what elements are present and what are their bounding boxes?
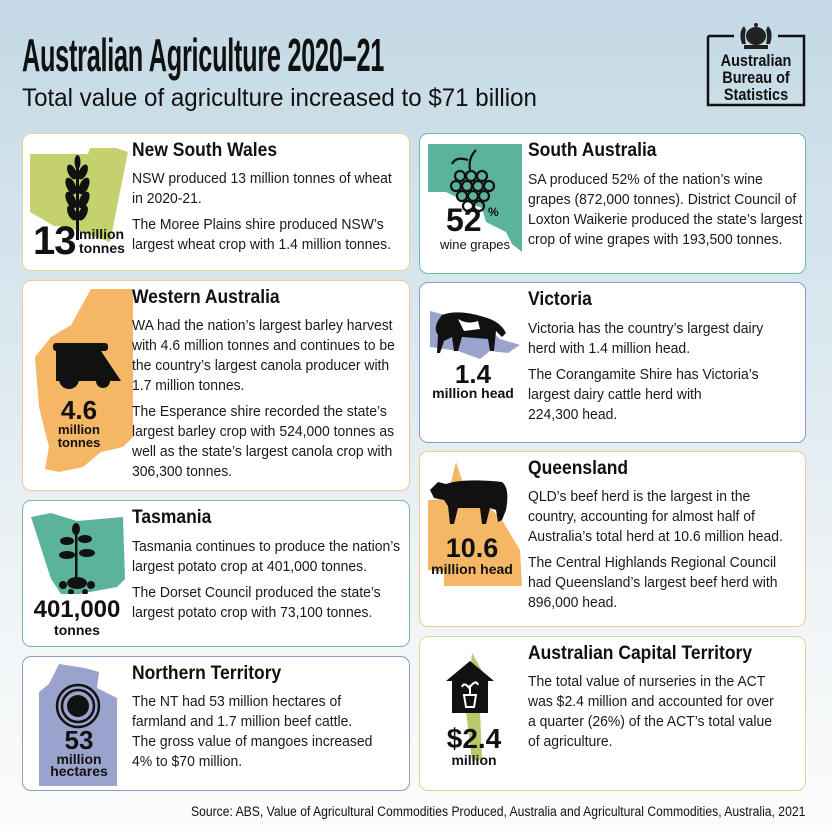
panel: Australian Capital Territory: a quarter (26%) of the ACT’s total value	[528, 713, 772, 730]
stat: 53 million hectares: 53	[65, 725, 93, 755]
panel: Tasmania: The Dorset Council produced the state’s	[132, 584, 381, 601]
logo: ABS: Australian	[721, 51, 791, 70]
stat: 13 million tonnes	[33, 219, 125, 263]
logo: ABS: Statistics	[724, 85, 788, 104]
stat: 4.6 million tonnes: tonnes	[58, 435, 100, 450]
map: SA with grapes icon	[428, 144, 522, 252]
panel: South Australia: South Australia	[528, 140, 657, 161]
panel: New South Wales: The Moree Plains shire produced NSW’s	[132, 216, 384, 233]
stat: 401,000 tonnes: 401,000	[34, 596, 120, 623]
panel: South Australia: Loxton Waikerie produced the state’s largest	[528, 211, 803, 228]
panel: Australian Capital Territory: The total value of nurseries in the ACT	[528, 673, 765, 690]
stat: 52% wine grapes: 52	[446, 202, 482, 238]
panel: Queensland: 896,000 head.	[528, 594, 617, 611]
panel: Victoria: 224,300 head.	[528, 406, 617, 423]
panel: Western Australia: with 4.6 million tonnes and continues to be	[132, 337, 395, 354]
stat: 1.4 million head: million head	[432, 385, 514, 401]
panel: Northern Territory	[22, 656, 410, 791]
panel: Queensland: country, accounting for almost half of	[528, 508, 755, 525]
stat: 13 million tonnes: tonnes	[79, 240, 125, 256]
stat: 10.6 million head	[431, 533, 513, 577]
panel: Tasmania	[22, 500, 410, 647]
map: Queensland with bull icon	[428, 462, 522, 586]
title: Australian Agriculture 2020–21	[22, 29, 384, 81]
panel: Australian Capital Territory: Australian Capital Territory	[528, 643, 752, 664]
panel: Northern Territory: The NT had 53 million hectares of	[132, 693, 341, 710]
panel: Victoria: herd with 1.4 million head.	[528, 340, 690, 357]
panel: Western Australia: well as the state’s largest canola crop with	[132, 443, 392, 460]
stat: 53 million hectares: million	[56, 751, 102, 767]
panel: Western Australia	[22, 280, 410, 491]
stat: 10.6 million head: million head	[431, 561, 513, 577]
panel: New South Wales: in 2020-21.	[132, 190, 202, 207]
panel: Queensland: Australia’s total herd at 10.6 million head.	[528, 528, 783, 545]
panel: Queensland: The Central Highlands Regional Council	[528, 554, 776, 571]
panel: New South Wales: NSW produced 13 million tonnes of wheat	[132, 170, 392, 187]
panel: New South Wales	[22, 133, 410, 271]
stat: 401,000 tonnes	[34, 596, 120, 638]
stat: $2.4 million: million	[451, 752, 497, 768]
stat: 52% wine grapes: %	[488, 205, 499, 219]
subtitle: Total value of agriculture increased to $71 billion	[22, 84, 537, 112]
panel: Western Australia: WA had the nation’s largest barley harvest	[132, 317, 393, 334]
panel: Northern Territory: farmland and 1.7 million beef cattle.	[132, 713, 352, 730]
panel: Victoria: The Corangamite Shire has Victoria’s	[528, 366, 759, 383]
stat: 13 million tonnes: 13	[33, 219, 76, 263]
stat: $2.4 million: $2.4	[447, 723, 501, 754]
panel: Queensland	[419, 451, 806, 627]
map: Victoria with cow icon	[430, 311, 520, 359]
stat: 1.4 million head: 1.4	[455, 359, 491, 389]
stat: 52% wine grapes	[440, 202, 510, 252]
stat: 4.6 million tonnes	[58, 395, 100, 450]
panel: Northern Territory: Northern Territory	[132, 663, 281, 684]
map: Tasmania with potato plant icon	[31, 513, 125, 594]
icon: coat of arms	[740, 23, 772, 49]
map: ACT with house plant icon	[446, 653, 494, 761]
stat: $2.4 million	[447, 723, 502, 768]
panel: Western Australia: Western Australia	[132, 287, 280, 308]
stat: 401,000 tonnes: tonnes	[54, 622, 100, 638]
panel: Western Australia: 306,300 tonnes.	[132, 463, 232, 480]
panel: Victoria: Victoria has the country’s largest dairy	[528, 320, 763, 337]
panel: Victoria	[419, 282, 806, 443]
panel: Western Australia: largest barley crop with 524,000 tonnes as	[132, 423, 394, 440]
panel: South Australia: grapes (872,000 tonnes). District Council of	[528, 191, 796, 208]
stat: 53 million hectares: hectares	[50, 763, 108, 779]
panel: Western Australia: 1.7 million tonnes.	[132, 377, 244, 394]
panel: Tasmania: largest potato crop at 401,000 tonnes.	[132, 558, 367, 575]
logo: ABS	[706, 23, 806, 106]
panel: South Australia: SA produced 52% of the nation’s wine	[528, 171, 763, 188]
panel: Queensland: had Queensland’s largest beef herd with	[528, 574, 777, 591]
map: NT with target icon	[39, 664, 117, 786]
panel: Australian Capital Territory: of agriculture.	[528, 733, 613, 750]
panel: Northern Territory: 4% to $70 million.	[132, 753, 242, 770]
panel: Victoria: Victoria	[528, 289, 592, 310]
panel: Northern Territory: The gross value of mangoes increased	[132, 733, 372, 750]
stat: 53 million hectares	[50, 725, 108, 779]
panel: New South Wales: New South Wales	[132, 140, 277, 161]
panel: Australian Capital Territory	[419, 636, 806, 791]
stat: 4.6 million tonnes: million	[58, 422, 100, 437]
panel: Tasmania: Tasmania continues to produce the nation’s	[132, 538, 400, 555]
stat: 4.6 million tonnes: 4.6	[61, 395, 97, 425]
panel: Victoria: largest dairy cattle herd with	[528, 386, 702, 403]
stat: 1.4 million head	[432, 359, 514, 401]
map: WA with harvester icon	[35, 289, 133, 472]
panel: South Australia	[419, 133, 806, 274]
panel: South Australia: crop of wine grapes with 193,500 tonnes.	[528, 231, 782, 248]
panel: Western Australia: the country’s largest canola producer with	[132, 357, 389, 374]
panel: Queensland: Queensland	[528, 458, 628, 479]
stat: 13 million tonnes: million	[79, 226, 124, 242]
panel: New South Wales: largest wheat crop with 1.4 million tonnes.	[132, 236, 391, 253]
panel: Tasmania: Tasmania	[132, 507, 211, 528]
stat: 10.6 million head: 10.6	[446, 533, 498, 563]
stat: 52% wine grapes: wine grapes	[440, 237, 510, 252]
panel: Western Australia: The Esperance shire recorded the state’s	[132, 403, 387, 420]
logo: ABS: Bureau of	[722, 68, 790, 87]
map: NSW with wheat icon	[30, 148, 128, 242]
panel: Tasmania: largest potato crop with 73,100 tonnes.	[132, 604, 372, 621]
panel: Australian Capital Territory: was $2.4 million and accounted for over	[528, 693, 774, 710]
panel: Queensland: QLD’s beef herd is the largest in the	[528, 488, 750, 505]
source note: Source: ABS, Value of Agricultural Commodities Produced, Australia and Agricultural Commodities, Australia, 2021	[191, 804, 805, 819]
